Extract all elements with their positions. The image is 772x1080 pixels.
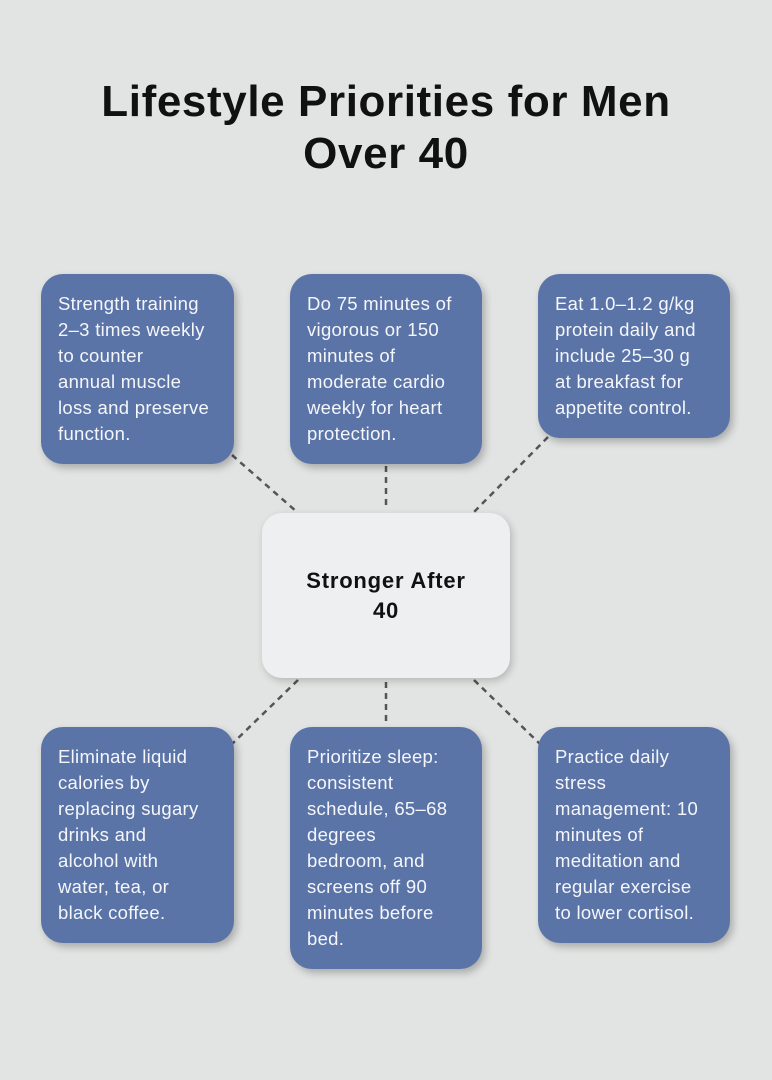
panel: liquid calories: replacing sugary xyxy=(58,798,199,819)
panel: strength training: to counter xyxy=(58,345,143,366)
panel: protein xyxy=(538,274,730,438)
panel: liquid calories: black coffee. xyxy=(58,902,165,923)
panel: sleep: degrees xyxy=(307,824,376,845)
panel: sleep: Prioritize sleep: xyxy=(307,746,439,767)
panel: strength training: loss and preserve xyxy=(58,397,209,418)
panel: protein: Eat 1.0–1.2 g/kg xyxy=(555,293,695,314)
panel: stress: stress xyxy=(555,772,606,793)
panel: strength training: 2–3 times weekly xyxy=(58,319,205,340)
center hub: Stronger After xyxy=(306,568,466,592)
panel: liquid calories: water, tea, or xyxy=(58,876,169,897)
panel: cardio: weekly for heart xyxy=(307,397,442,418)
panel: sleep: schedule, 65–68 xyxy=(307,798,447,819)
panel: cardio: moderate cardio xyxy=(307,371,445,392)
panel: cardio: vigorous or 150 xyxy=(307,319,439,340)
panel: strength training: annual muscle xyxy=(58,371,181,392)
panel: protein: appetite control. xyxy=(555,397,692,418)
panel: stress: regular exercise xyxy=(555,876,691,897)
center hub xyxy=(262,513,510,678)
panel: sleep: bed. xyxy=(307,928,344,949)
panel: stress: minutes of xyxy=(555,824,643,845)
panel: stress xyxy=(538,727,730,943)
title xyxy=(101,77,671,178)
panel: liquid calories: alcohol with xyxy=(58,850,158,871)
panel: cardio: Do 75 minutes of xyxy=(307,293,452,314)
panel: stress: to lower cortisol. xyxy=(555,902,694,923)
panel: liquid calories: Eliminate liquid xyxy=(58,746,187,767)
panel: cardio: protection. xyxy=(307,423,397,444)
panel: strength training xyxy=(41,274,234,464)
panel: strength training: Strength training xyxy=(58,293,199,314)
panel: stress: management: 10 xyxy=(555,798,698,819)
panel: sleep: bedroom, and xyxy=(307,850,425,871)
panel: liquid calories: calories by xyxy=(58,772,150,793)
panel: cardio: minutes of xyxy=(307,345,395,366)
panel: stress: meditation and xyxy=(555,850,681,871)
panel: strength training: function. xyxy=(58,423,131,444)
panel: protein: protein daily and xyxy=(555,319,696,340)
panel: sleep: minutes before xyxy=(307,902,434,923)
panel: stress: Practice daily xyxy=(555,746,669,767)
panel: sleep: consistent xyxy=(307,772,393,793)
panel: liquid calories xyxy=(41,727,234,943)
panel: sleep xyxy=(290,727,482,969)
center hub: 40 xyxy=(373,598,399,622)
title: Over 40 xyxy=(303,129,469,178)
title: Lifestyle Priorities for Men xyxy=(101,77,671,126)
panel: protein: at breakfast for xyxy=(555,371,683,392)
panel: liquid calories: drinks and xyxy=(58,824,146,845)
panel: cardio xyxy=(290,274,482,464)
panel: sleep: screens off 90 xyxy=(307,876,427,897)
panel: protein: include 25–30 g xyxy=(555,345,690,366)
